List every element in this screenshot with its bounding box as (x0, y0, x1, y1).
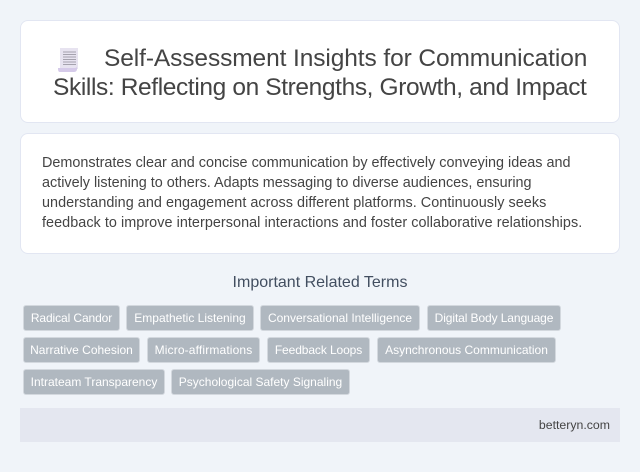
text block: summary: Demonstrates clear and concise communication by effectively conveying ideas and (42, 155, 570, 171)
text block: summary: actively listening to others. Adapts messaging to diverse audiences, ensuring (42, 175, 532, 191)
text block: summary: understanding and engagement across different platforms. Continuously seeks (42, 195, 546, 211)
tag: Digital Body Language (435, 311, 553, 325)
tag (260, 305, 420, 331)
tag: Narrative Cohesion (30, 343, 133, 357)
panel: title card (20, 20, 620, 123)
tag (23, 305, 120, 331)
tag: Empathetic Listening (134, 311, 246, 325)
tag: Asynchronous Communication (385, 343, 548, 357)
panel: summary card (20, 133, 620, 254)
tag: Psychological Safety Signaling (179, 375, 342, 389)
tag (23, 369, 165, 395)
heading: related terms: Important Related Terms (233, 274, 407, 291)
heading: line 1: Self-Assessment Insights for Communication (104, 45, 587, 72)
text block: summary: feedback to improve interpersonal interactions and foster collaborative relationships. (42, 215, 582, 231)
tag: Conversational Intelligence (268, 311, 412, 325)
tag: Intrateam Transparency (31, 375, 157, 389)
footer: site name: betteryn.com (539, 418, 610, 432)
tag (126, 305, 254, 331)
tag (427, 305, 561, 331)
tags: related terms (23, 305, 561, 395)
icon: scroll document (58, 48, 78, 72)
footer bar (20, 408, 620, 442)
tag (147, 337, 260, 363)
tag (171, 369, 350, 395)
text block: summary (42, 155, 582, 231)
tag: Radical Candor (31, 311, 112, 325)
tag (377, 337, 556, 363)
tag (267, 337, 370, 363)
tag (23, 337, 140, 363)
tag: Micro-affirmations (155, 343, 252, 357)
tag: Feedback Loops (275, 343, 362, 357)
heading: line 2: Skills: Reflecting on Strengths, Growth, and Impact (53, 74, 586, 101)
